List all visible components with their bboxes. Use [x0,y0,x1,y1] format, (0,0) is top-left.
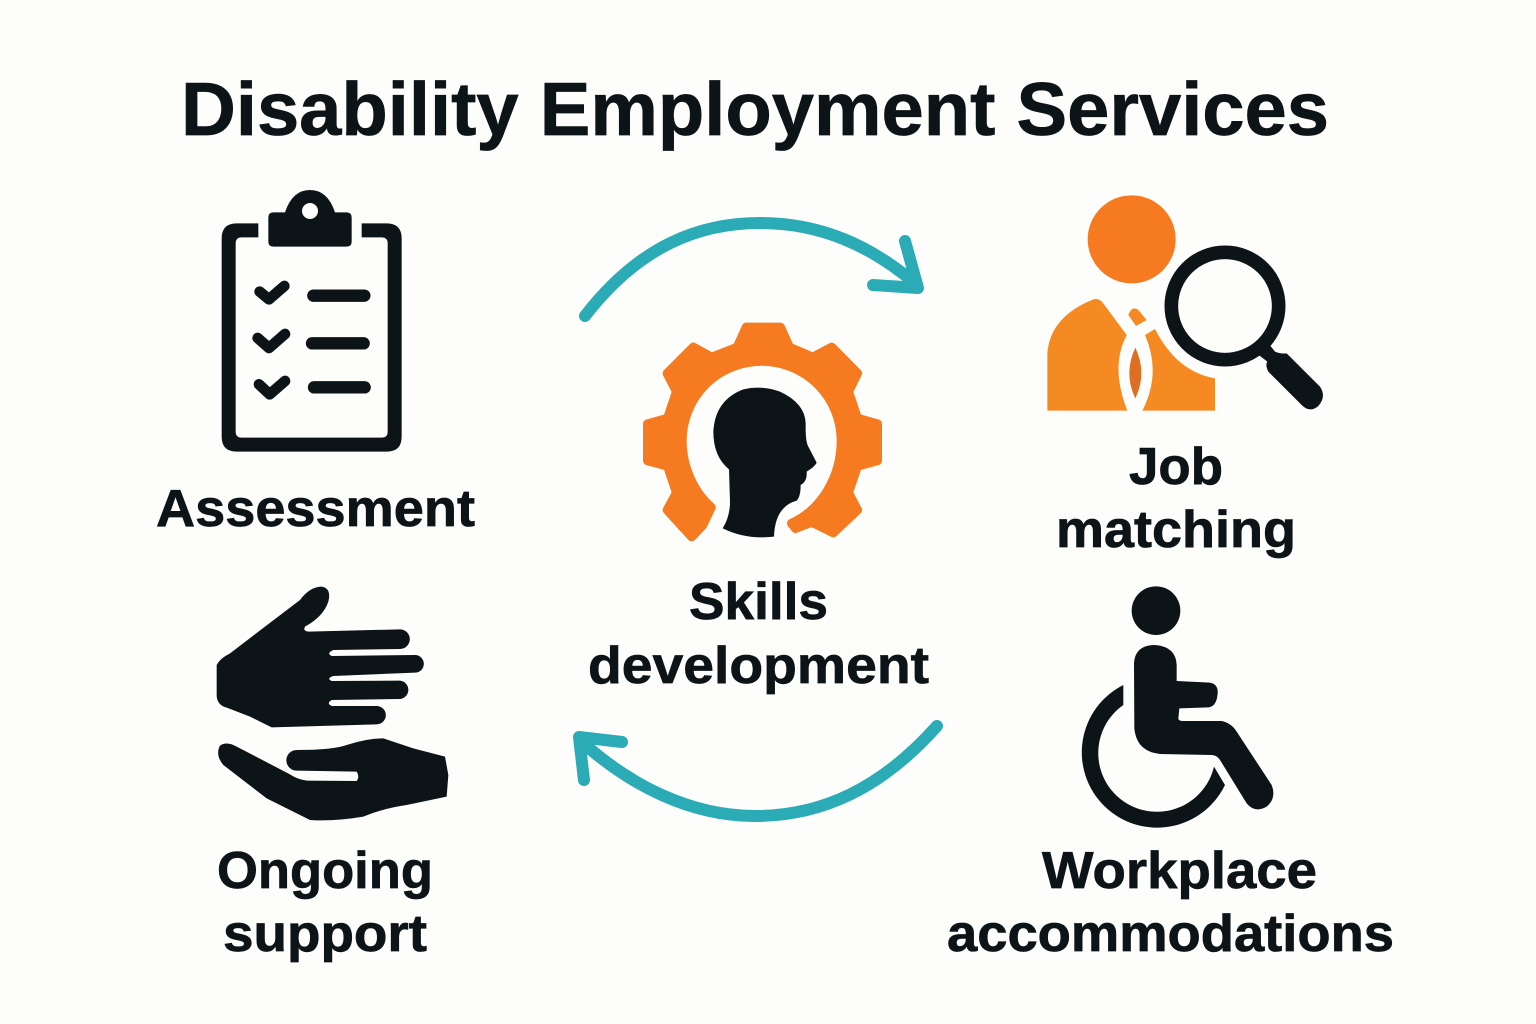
label: Workplace accommodations [947,842,1394,963]
label: Ongoing support: support [223,905,427,963]
panel: assessment [156,190,475,538]
label: Assessment: Assessment [156,480,475,538]
label: Job matching: matching [1056,501,1296,559]
title: Disability Employment Services [181,67,1329,151]
label: Workplace accommodations: Workplace [1042,842,1317,900]
label: Job matching [1056,438,1296,559]
panel: ongoing support [217,587,448,963]
arrow: top clockwise [585,223,918,316]
label: Skills development: development [588,637,929,695]
panel: job matching [1047,195,1323,559]
label: Ongoing support: Ongoing [217,842,433,900]
label: Ongoing support [217,842,433,963]
label: Workplace accommodations: accommodations [947,905,1394,963]
label: Job matching: Job [1129,438,1223,496]
panel: workplace accommodations [947,586,1394,963]
label: Skills development [588,573,929,695]
icon: clipboard checklist [222,190,402,452]
icon: wheelchair user [1082,586,1273,828]
panel: skills development [588,327,929,695]
arrow: bottom clockwise [579,726,937,816]
icon: gear with head silhouette [648,327,877,537]
icon: person with magnifying glass [1047,195,1323,411]
label: Skills development: Skills [689,573,828,631]
icon: open hands [217,587,448,820]
